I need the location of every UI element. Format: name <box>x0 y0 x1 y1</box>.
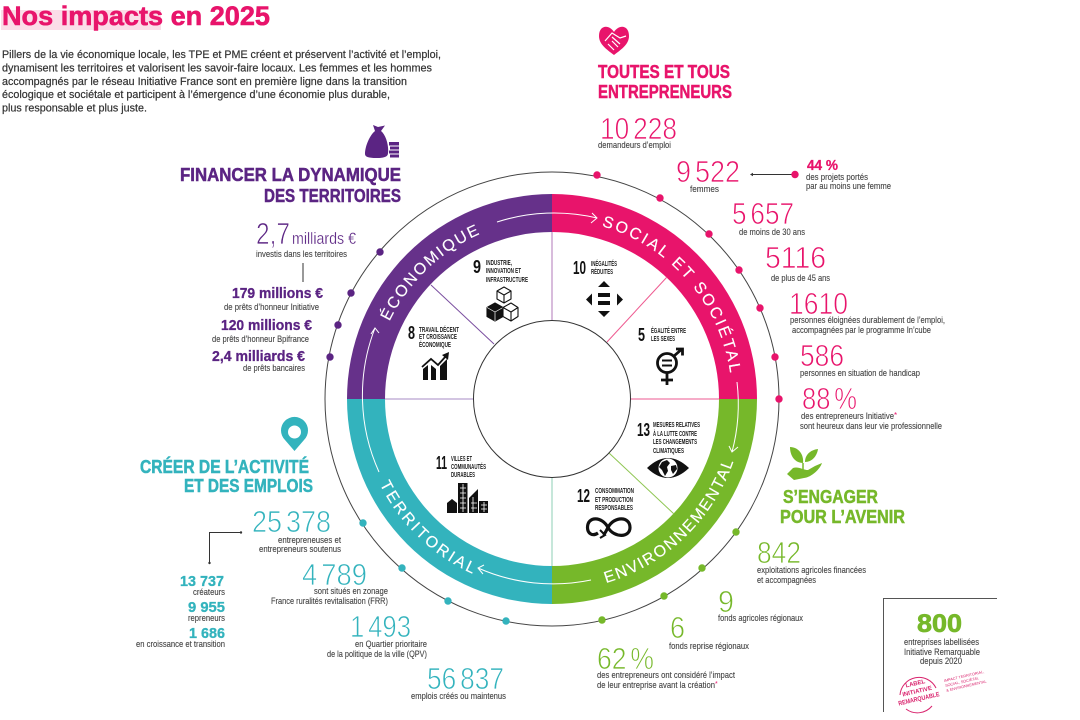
ring label: social et sociétal: SOCIAL ET SOCIÉTAL <box>602 216 740 373</box>
intro paragraph: accompagnés par le réseau Initiative France sont en première ligne dans la transition <box>2 76 407 88</box>
stat: 2,4 milliards: 2,4 milliards € <box>212 348 306 365</box>
heading: FINANCER LA DYNAMIQUE <box>180 165 401 185</box>
intro paragraph: dynamisent les territoires et valorisent les savoir-faire locaux. Les femmes et les hommes <box>2 62 433 74</box>
stat: 6: 6 <box>670 610 685 645</box>
SDG 11: 11 <box>436 453 447 473</box>
SDG 13: 13 <box>637 420 650 440</box>
segment: territorial <box>347 399 552 604</box>
intro paragraph: plus responsable et plus juste. <box>2 102 147 114</box>
stat: 179 millions: 179 millions € <box>232 285 324 302</box>
stat: 1610: accompagnées par le programme In’cube <box>792 325 931 336</box>
stat: 842 <box>757 535 866 586</box>
SDG 12: ET PRODUCTION <box>595 497 633 504</box>
stat: 13 737 <box>180 573 225 598</box>
ring label: économique: ÉCONOMIQUE <box>380 224 480 320</box>
icon: location pin <box>281 417 308 451</box>
SDG 9: INDUSTRIE, <box>486 260 512 267</box>
stat: 9 <box>718 584 803 624</box>
pink connection dots <box>593 171 783 403</box>
stat: 120 millions: 120 millions € <box>221 317 313 334</box>
arrow: to 44 % <box>750 171 799 178</box>
stat: 1 493: de la politique de la ville (QPV) <box>327 649 427 660</box>
stat: 56 837: 56 837 <box>427 661 504 696</box>
SDG 9 <box>473 257 528 321</box>
stat: 1610: personnes éloignées durablement de l’emploi, <box>790 315 945 326</box>
heading <box>180 165 401 206</box>
arrow: 2,7 milliards to details <box>302 263 304 282</box>
icon: label stamp: IMPACT TERRITORIAL, <box>944 670 985 683</box>
stat: 2,4 milliards: de prêts bancaires <box>243 363 305 374</box>
SDG 5: LES SEXES <box>651 336 675 343</box>
icon: label stamp: SOCIAL, SOCIÉTAL <box>945 675 979 688</box>
segment: social et sociétal <box>552 194 757 399</box>
stat: 1 493: en Quartier prioritaire <box>355 639 427 650</box>
SDG 10: RÉDUITES <box>591 267 613 276</box>
stat: 179 millions: de prêts d’honneur Initiative <box>224 302 319 313</box>
SDG 8 <box>408 323 459 380</box>
stat: 1 493 <box>327 609 427 660</box>
icon: eye globe <box>647 458 689 478</box>
SDG 8: ÉCONOMIQUE <box>419 340 451 349</box>
stat: 25 378 <box>252 504 341 555</box>
stat: 44 %: des projets portés <box>806 172 868 183</box>
stat: 842: 842 <box>757 535 801 570</box>
SDG 9: INFRASTRUCTURE <box>486 277 528 284</box>
stat: 2,7 milliards: 2,7 <box>256 216 290 251</box>
stat: 62 %: * <box>715 681 718 688</box>
segment: environnemental <box>552 399 757 604</box>
stat: 586 <box>800 338 920 379</box>
stat: 2,7 milliards: milliards € <box>292 229 356 248</box>
heading: POUR L’AVENIR <box>780 507 905 527</box>
SDG 11: VILLES ET <box>451 456 472 463</box>
heading: CRÉER DE L’ACTIVITÉ <box>140 456 309 477</box>
stat: 5 657: 5 657 <box>732 196 794 231</box>
outer thin circle <box>325 172 779 626</box>
heading <box>780 487 905 527</box>
stat: 44 %: 44 % <box>807 157 838 174</box>
stat: 9: 9 <box>718 584 734 619</box>
stat: 25 378: entrepreneuses et <box>278 535 341 546</box>
SDG 10: INÉGALITÉS <box>591 259 617 268</box>
SDG 11: DURABLES <box>451 472 475 479</box>
stat: 5 657: de moins de 30 ans <box>739 227 805 238</box>
SDG 11 <box>436 453 488 513</box>
stat: 88 %: 88 % <box>802 381 857 416</box>
teal connection dots <box>359 519 510 625</box>
stat: 4 789: France ruralités revitalisation (FRR) <box>271 596 388 607</box>
stat: 5116: de plus de 45 ans <box>771 273 830 284</box>
stat: 1 493: 1 493 <box>350 609 411 644</box>
stat: 4 789: 4 789 <box>302 557 367 592</box>
stat: 44 %: par au moins une femme <box>806 181 891 192</box>
stat: 88 %: des entrepreneurs Initiative <box>801 411 894 422</box>
SDG 13: LES CHANGEMENTS <box>653 439 697 446</box>
callout: label initiative remarquable <box>884 598 997 713</box>
stat: 44 % <box>806 157 891 192</box>
stat: 9 955: 9 955 <box>188 599 225 616</box>
icon: label stamp: REMARQUABLE <box>898 691 941 708</box>
stat: 62 %: 62 % <box>597 641 654 676</box>
ring label: territorial: TERRITORIAL <box>382 479 473 574</box>
SDG 12 <box>577 486 634 538</box>
SDG 11: COMMUNAUTÉS <box>451 462 486 471</box>
SDG 12: 12 <box>577 486 590 506</box>
stat: 88 %: sont heureux dans leur vie professionnelle <box>800 421 942 432</box>
icon: cubes <box>487 287 518 321</box>
intro paragraph: écologique et sociétale et participent à l’émergence d’une économie plus durable, <box>2 89 390 101</box>
stat: 25 378: entrepreneurs soutenus <box>259 544 341 555</box>
heading: ENTREPRENEURS <box>598 82 732 102</box>
stat: 800: 800 <box>917 610 962 638</box>
stat: 179 millions <box>224 285 324 313</box>
panel: s'engager pour l'avenir <box>597 447 905 691</box>
SDG 8: ET CROISSANCE <box>419 334 457 341</box>
stat: 6: fonds reprise régionaux <box>669 641 749 652</box>
spokes <box>385 232 719 566</box>
stat: 88 % <box>800 381 942 432</box>
heading: DES TERRITOIRES <box>264 186 401 206</box>
stat: 56 837: emplois créés ou maintenus <box>411 691 506 702</box>
purple connection dots <box>326 248 384 361</box>
stat: 4 789 <box>271 557 388 607</box>
stat: 842: exploitations agricoles financées <box>757 565 866 576</box>
icon: label stamp: LABEL <box>905 679 926 689</box>
stat: 4 789: sont situés en zonage <box>314 586 388 597</box>
stat: 1610 <box>789 286 945 336</box>
title: Nos impacts en 2025 <box>2 1 270 31</box>
caption: entreprises labellisées <box>904 637 979 648</box>
SDG 12: RESPONSABLES <box>595 505 633 512</box>
stat: 56 837 <box>411 661 506 702</box>
inner circle <box>474 320 630 478</box>
heading: TOUTES ET TOUS <box>598 62 730 82</box>
stat: 13 737: créateurs <box>193 587 225 598</box>
ring arrows <box>362 213 738 584</box>
stat: 62 %: de leur entreprise avant la création <box>597 680 715 691</box>
stat: 2,7 milliards <box>256 216 356 260</box>
SDG 13: CLIMATIQUES <box>653 448 684 455</box>
heading: S’ENGAGER <box>783 487 878 507</box>
SDG 8: TRAVAIL DÉCENT <box>419 325 459 334</box>
stat: 120 millions <box>212 317 313 345</box>
stat: 1 686 <box>136 625 225 650</box>
stat: 13 737: 13 737 <box>180 573 224 590</box>
ring label: environnemental: ENVIRONNEMENTAL <box>604 462 734 583</box>
stat: 9: fonds agricoles régionaux <box>718 613 803 624</box>
icon: infinity loop <box>588 519 630 538</box>
SDG 8: 8 <box>408 323 415 343</box>
SDG 10 <box>573 258 623 317</box>
stat: 5116: 5116 <box>765 240 826 275</box>
stat: 586: personnes en situation de handicap <box>800 368 920 379</box>
stat: 1610: 1610 <box>789 286 848 321</box>
icon: label stamp: & ENVIRONNEMENTAL <box>946 680 987 693</box>
stat: 10 228: demandeurs d’emploi <box>598 140 671 151</box>
icon: city <box>447 483 488 513</box>
SDG 5: 5 <box>638 325 645 345</box>
caption: Initiative Remarquable <box>904 647 980 658</box>
intro paragraph: Pillers de la vie économique locale, les TPE et PME créent et préservent l’activité et l’emploi, <box>2 49 441 61</box>
stat: 2,4 milliards <box>212 348 306 374</box>
SDG 10: 10 <box>573 258 586 278</box>
stat: 9 522: 9 522 <box>676 154 740 189</box>
stat: 25 378: 25 378 <box>252 504 331 539</box>
stat: 842: et accompagnées <box>757 575 816 586</box>
stat: 10 228: 10 228 <box>600 111 677 146</box>
heading <box>598 62 732 102</box>
SDG 5: ÉGALITÉ ENTRE <box>651 326 686 335</box>
panel: toutes et tous entrepreneurs <box>593 27 945 432</box>
caption <box>904 637 980 667</box>
heading <box>140 456 313 496</box>
stat: 88 %: * <box>894 411 897 420</box>
intro paragraph <box>2 49 441 114</box>
stat: 2,7 milliards: investis dans les territoires <box>256 249 347 260</box>
stat: 1 686: en croissance et transition <box>136 639 225 650</box>
green connection dots <box>598 528 740 624</box>
arrow: elbow connector <box>208 531 242 564</box>
panel: créer de l'activité et des emplois <box>136 417 510 702</box>
icon: label stamp: INITIATIVE <box>902 686 933 698</box>
stat: 586: 586 <box>800 338 844 373</box>
stat: 9 522: femmes <box>690 184 719 195</box>
caption: depuis 2020 <box>920 656 962 667</box>
stat: 1 686: 1 686 <box>189 625 225 642</box>
icon: growth chart <box>422 352 449 380</box>
SDG 9: 9 <box>473 257 481 277</box>
stat: 6 <box>669 610 749 652</box>
SDG 12: CONSOMMATION <box>595 488 634 495</box>
stat: 62 % <box>597 641 735 691</box>
SDG 13: À LA LUTTE CONTRE <box>653 429 697 438</box>
SDG 13 <box>637 420 700 478</box>
icon: money bag <box>365 125 399 158</box>
panel: financer la dynamique des territoires <box>180 125 401 374</box>
icon: gender equality <box>658 349 682 385</box>
SDG 9: INNOVATION ET <box>486 268 521 275</box>
icon: handshake heart <box>599 27 629 55</box>
icon: hand with plant <box>787 447 822 480</box>
icon: inequality arrows <box>586 281 623 317</box>
stat: 62 %: des entrepreneurs ont considéré l’impact <box>597 670 735 681</box>
segment: économique <box>347 194 552 399</box>
central wheel <box>347 194 757 604</box>
stat: 9 955 <box>188 599 225 624</box>
stat: 9 955: repreneurs <box>188 613 225 624</box>
SDG 13: MESURES RELATIVES <box>653 422 700 429</box>
stat: 120 millions: de prêts d’honneur Bpifrance <box>212 334 309 345</box>
SDG 5 <box>638 325 686 385</box>
heading: ET DES EMPLOIS <box>184 476 313 496</box>
icon: label stamp <box>894 670 987 713</box>
